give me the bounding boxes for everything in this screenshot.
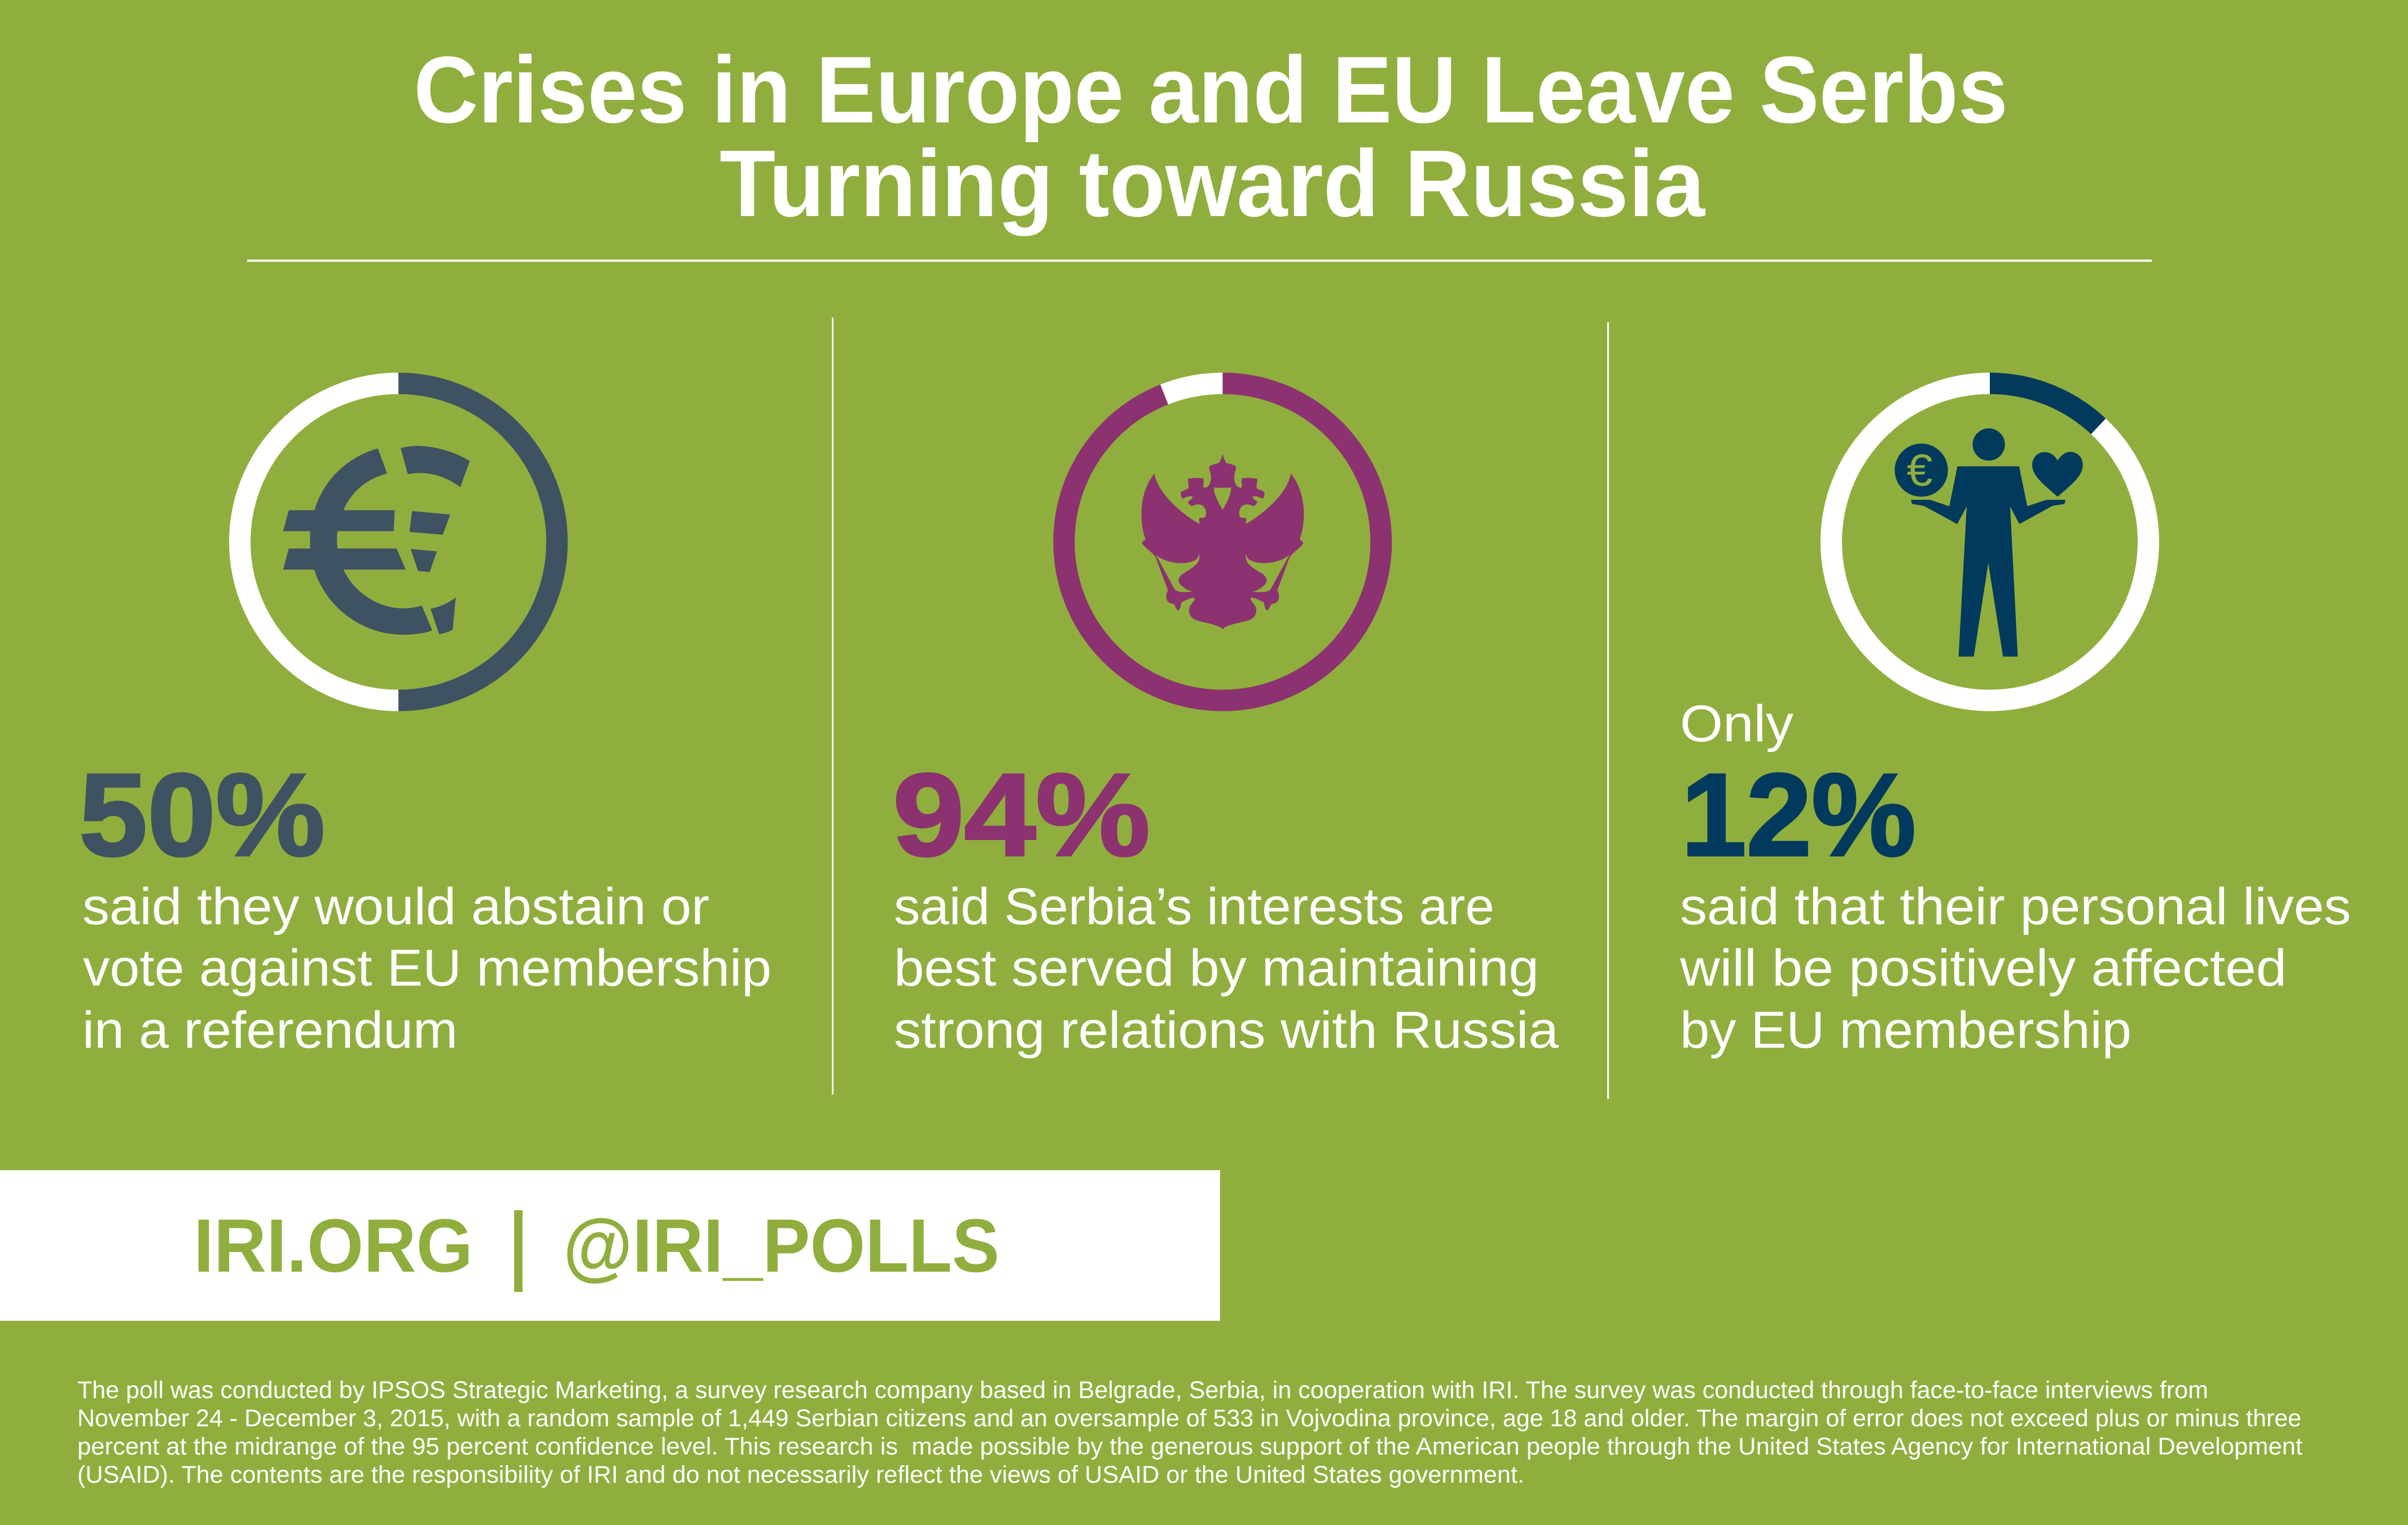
description: relations with Russia	[894, 878, 1559, 1059]
footnote: methodology: November 24 - December 3, 2015, with a random sample of 1,449 Serbian citizens and an oversample of 533 in Vojvodina province, age 18 and older. The margin of error does not exceed plus or minus three	[77, 1405, 2301, 1432]
description: abstain or vote against	[82, 878, 771, 1059]
description: personal lives: said that their personal lives	[1680, 878, 2351, 935]
description: relations with Russia: said Serbia’s interests are	[894, 878, 1494, 935]
title: Crises in Europe and EU Leave Serbs	[414, 37, 2008, 143]
title: Turning toward Russia	[720, 130, 1706, 236]
panel: relations with Russia	[893, 383, 1559, 1059]
description: abstain or vote against: said they would abstain or	[82, 878, 709, 935]
icon: double-headed eagle	[1142, 455, 1304, 629]
banner: website and social handle: IRI.ORG	[194, 1204, 473, 1288]
footnote: methodology: The poll was conducted by IPSOS Strategic Marketing, a survey research company based in Belgrade, Serbia, in cooperation with IRI. The survey was conducted through face-to-face interviews from	[77, 1377, 2208, 1404]
footnote: methodology: percent at the midrange of the 95 percent confidence level. This research is made possible by the generous support of the American people through the United States Agency for International Development	[77, 1433, 2302, 1460]
footnote: methodology	[77, 1377, 2302, 1488]
icon: person weighing euro and heart: €	[1906, 445, 1933, 495]
statistic: 94%: 94%	[893, 750, 1150, 881]
panel: personal lives	[1679, 384, 2351, 1059]
description: personal lives: will be positively affected	[1679, 939, 2287, 997]
statistic: 12%: 12%	[1681, 750, 1916, 881]
icon: person weighing euro and heart	[1894, 428, 2083, 657]
banner: website and social handle: @IRI_POLLS	[563, 1204, 999, 1288]
donut chart: 50 percent	[240, 384, 557, 701]
donut chart: 12 percent	[1831, 384, 2148, 701]
description: relations with Russia: strong relations with Russia	[894, 1001, 1559, 1059]
title	[414, 37, 2008, 236]
description: abstain or vote against: in a referendum	[82, 1001, 458, 1059]
donut chart: 94 percent	[1064, 383, 1381, 700]
description: personal lives: by EU membership	[1680, 1001, 2131, 1059]
panel: abstain or vote against EU	[79, 384, 771, 1059]
icon: broken euro	[283, 446, 470, 635]
banner: website and social handle	[0, 1170, 1220, 1321]
statistic: 50%: 50%	[79, 750, 325, 881]
description: abstain or vote against: vote against EU membership	[83, 939, 771, 997]
description: relations with Russia: best served by maintaining	[894, 939, 1539, 997]
label: Only: Only	[1680, 695, 1793, 753]
description: personal lives	[1679, 878, 2351, 1059]
footnote: methodology: (USAID). The contents are the responsibility of IRI and do not necessarily reflect the views of USAID or the United States government.	[77, 1461, 1524, 1488]
